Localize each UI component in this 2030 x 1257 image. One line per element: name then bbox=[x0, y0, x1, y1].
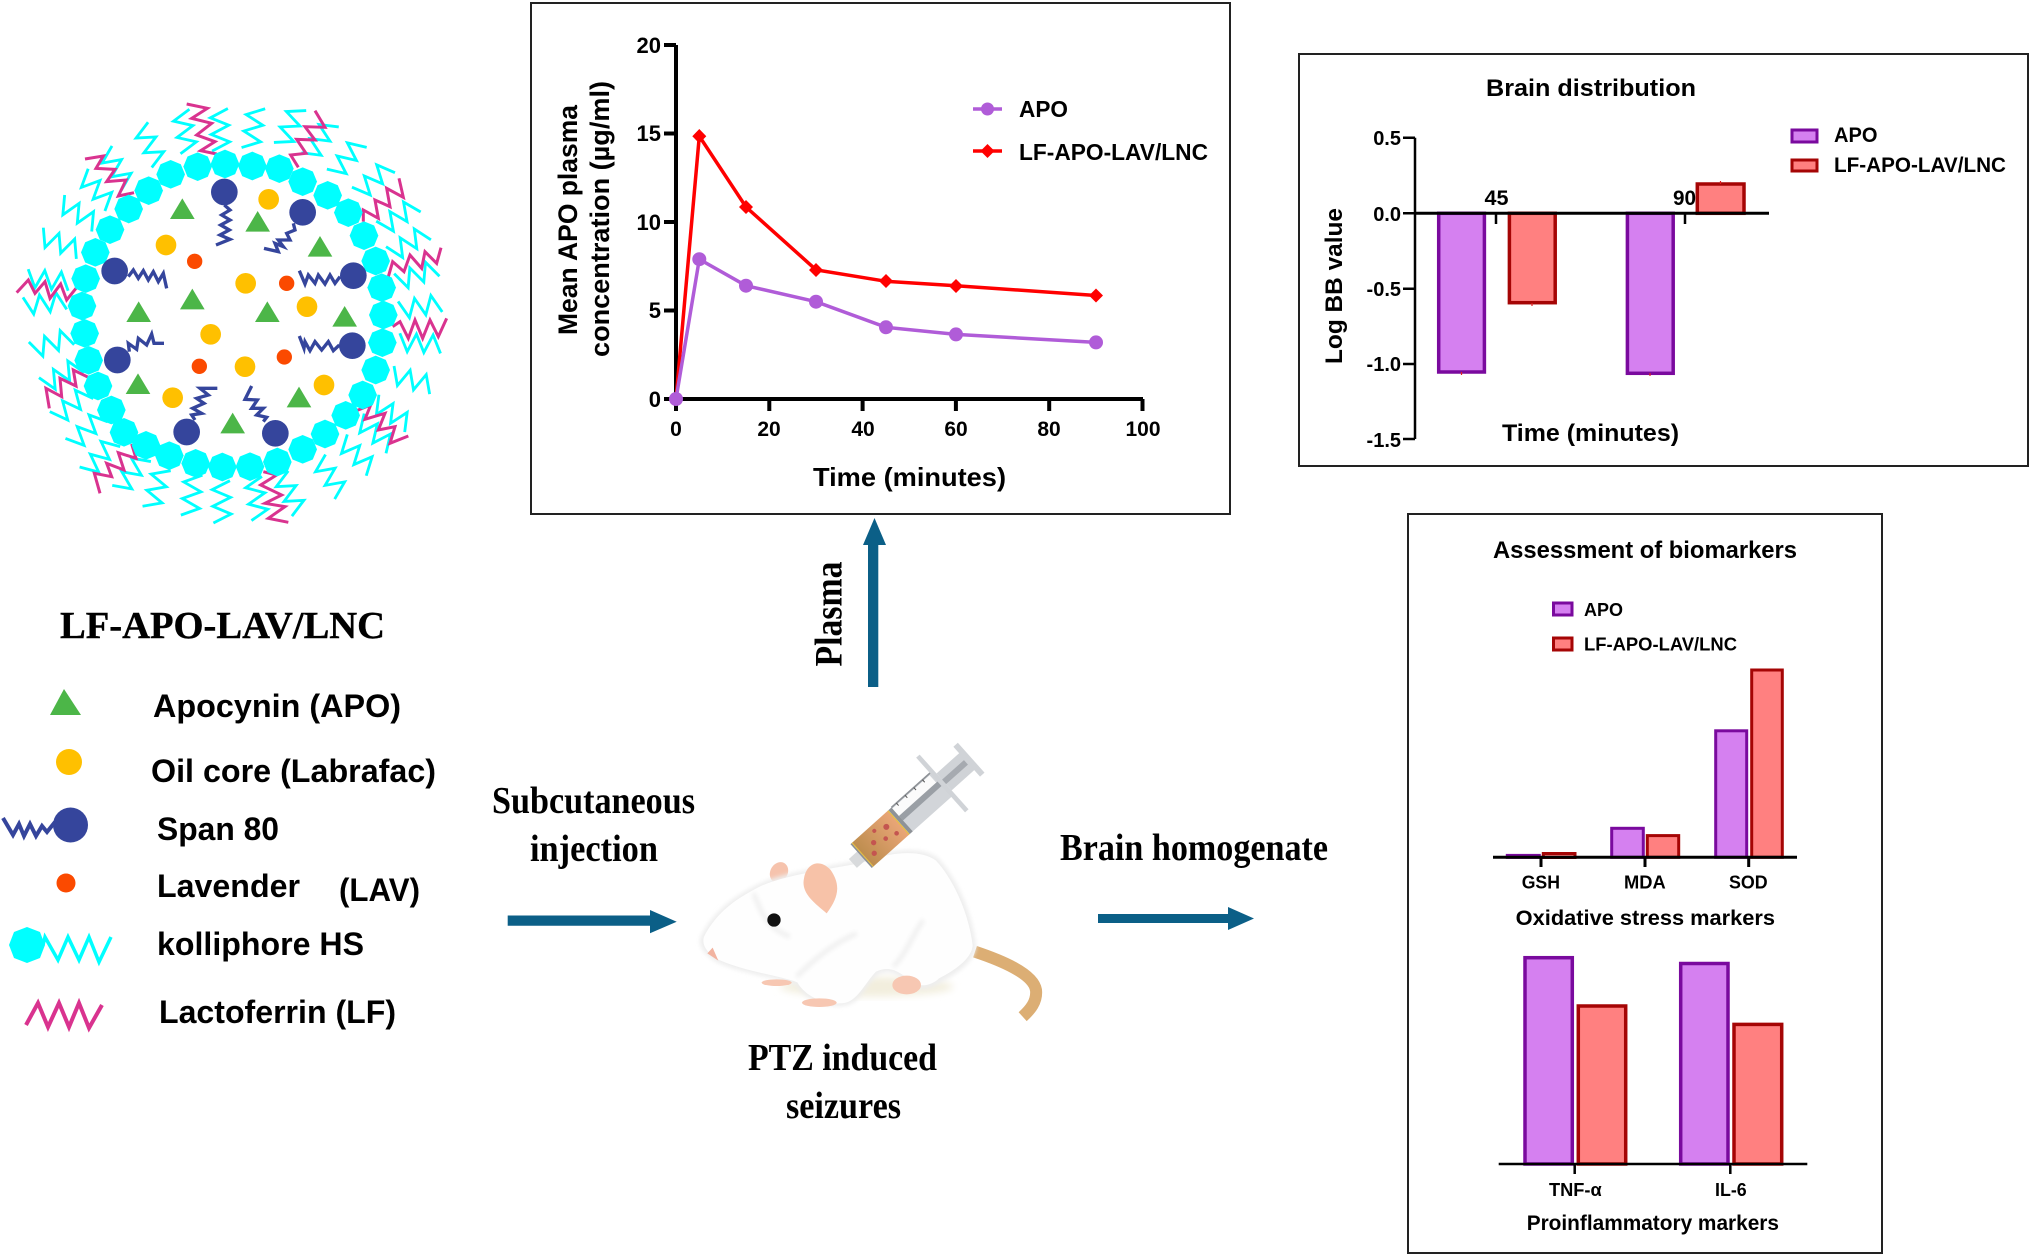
legend title: LF-APO-LAV/LNC bbox=[60, 605, 385, 647]
span 80 molecules bbox=[101, 179, 367, 447]
x tick labels: 40 bbox=[851, 418, 875, 441]
bars bbox=[1439, 184, 1744, 373]
x axis title: Time (minutes) bbox=[1502, 420, 1679, 447]
label: lactoferrin: Lactoferrin (LF) bbox=[159, 994, 396, 1030]
label: proinflammatory markers: Proinflammatory markers bbox=[1527, 1212, 1779, 1235]
chart: proinflammatory markers: IL-6 bbox=[1715, 1180, 1747, 1200]
axes bbox=[1403, 138, 1769, 439]
illustration: rat with syringe bbox=[700, 730, 1036, 1017]
chart: oxidative stress markers: MDA bbox=[1624, 873, 1666, 893]
legend bbox=[1554, 600, 1737, 654]
chart title: Brain distribution bbox=[1486, 75, 1696, 102]
tail bbox=[975, 952, 1036, 1017]
label: span 80: Span 80 bbox=[157, 811, 279, 847]
series: APO bbox=[669, 252, 1103, 406]
label: oxidative stress markers: Oxidative stress markers bbox=[1516, 907, 1775, 930]
panel: brain distribution bar chart bbox=[1299, 54, 2028, 466]
y tick labels: 0.0 bbox=[1373, 204, 1401, 226]
y tick labels bbox=[637, 33, 661, 412]
label: LAV abbreviation: (LAV) bbox=[339, 872, 420, 908]
y tick labels: 10 bbox=[637, 210, 661, 235]
panel: plasma concentration line chart bbox=[531, 3, 1230, 514]
body bbox=[703, 853, 973, 1003]
icon: lavender bbox=[56, 874, 76, 892]
y axis title bbox=[553, 81, 615, 357]
lavender droplets bbox=[187, 254, 294, 374]
body shadow bbox=[700, 850, 976, 1006]
chart: proinflammatory markers: TNF-α bbox=[1549, 1180, 1602, 1200]
y tick labels: 5 bbox=[649, 298, 661, 323]
x tick labels: 100 bbox=[1125, 418, 1161, 441]
nose bbox=[707, 948, 718, 961]
paws bbox=[762, 976, 921, 1007]
legend: APO bbox=[1834, 124, 1878, 147]
syringe bbox=[828, 730, 996, 891]
chart: oxidative stress markers: GSH bbox=[1522, 873, 1560, 893]
icon: span 80 bbox=[3, 808, 88, 842]
label: plasma: Plasma bbox=[808, 562, 850, 666]
y tick labels: 0 bbox=[649, 387, 661, 412]
legend: APO bbox=[1584, 600, 1623, 620]
axes bbox=[664, 45, 1143, 411]
label: subcutaneous injection: injection bbox=[530, 828, 658, 870]
legend: LF-APO-LAV/LNC bbox=[1019, 139, 1208, 165]
y tick labels: 0.5 bbox=[1373, 128, 1401, 150]
legend bbox=[1792, 124, 2006, 177]
caption: PTZ induced seizures: PTZ induced bbox=[748, 1037, 937, 1079]
x axis title: Time (minutes) bbox=[813, 462, 1006, 492]
chart: oxidative stress markers: SOD bbox=[1729, 873, 1768, 893]
y tick labels: -1.5 bbox=[1367, 430, 1401, 452]
fur shading bbox=[753, 893, 923, 977]
series: LF-APO-LAV/LNC bbox=[676, 129, 1103, 399]
chart: oxidative stress markers bbox=[1493, 670, 1797, 893]
y axis title: Log BB value bbox=[1321, 208, 1348, 364]
caption: PTZ induced seizures bbox=[748, 1037, 937, 1127]
apocynin triangles bbox=[126, 198, 357, 433]
legend: APO bbox=[1019, 96, 1068, 122]
chart: proinflammatory markers bbox=[1499, 958, 1807, 1200]
error ticks bbox=[1462, 181, 1720, 376]
oil core droplets bbox=[156, 189, 334, 408]
legend: component key bbox=[3, 688, 436, 1030]
y tick labels: 20 bbox=[637, 33, 661, 58]
label: oil core: Oil core (Labrafac) bbox=[151, 753, 436, 789]
x tick labels: 80 bbox=[1037, 418, 1061, 441]
icon: lactoferrin bbox=[26, 1003, 102, 1028]
category labels bbox=[1484, 187, 1696, 210]
category labels: 45 bbox=[1484, 187, 1509, 210]
y axis title: concentration (µg/ml) bbox=[585, 81, 615, 357]
icon: kolliphore bbox=[9, 927, 111, 963]
label: brain homogenate: Brain homogenate bbox=[1060, 827, 1328, 869]
arrow: injection bbox=[508, 910, 677, 933]
y axis title: Mean APO plasma bbox=[553, 104, 583, 335]
eye bbox=[767, 913, 781, 927]
label: lavender: Lavender bbox=[157, 868, 300, 904]
panel title: Assessment of biomarkers bbox=[1493, 537, 1797, 564]
icon: oil core bbox=[56, 749, 82, 775]
kolliphore heads bbox=[68, 150, 398, 481]
y tick labels: -0.5 bbox=[1367, 279, 1401, 301]
y tick labels: 15 bbox=[637, 121, 661, 146]
label: apocynin: Apocynin (APO) bbox=[153, 688, 401, 724]
legend: LF-APO-LAV/LNC bbox=[1834, 154, 2006, 177]
rear ear bbox=[766, 859, 792, 886]
x tick labels: 20 bbox=[757, 418, 781, 441]
panel: assessment of biomarkers bbox=[1408, 514, 1882, 1253]
ground shadow bbox=[780, 977, 953, 997]
legend bbox=[973, 96, 1208, 165]
arrow: to plasma bbox=[863, 518, 886, 687]
legend: LF-APO-LAV/LNC bbox=[1584, 634, 1737, 654]
kolliphore tails bbox=[23, 104, 442, 523]
caption: PTZ induced seizures: seizures bbox=[786, 1085, 901, 1127]
y tick labels bbox=[1367, 128, 1401, 452]
category labels: 90 bbox=[1673, 187, 1696, 210]
label: subcutaneous injection: Subcutaneous bbox=[492, 780, 695, 822]
arrow: brain homogenate bbox=[1098, 907, 1254, 930]
lactoferrin chains bbox=[17, 104, 447, 522]
front ear bbox=[804, 863, 837, 913]
x tick labels: 0 bbox=[670, 418, 682, 441]
label: kolliphore: kolliphore HS bbox=[157, 926, 364, 962]
y tick labels: -1.0 bbox=[1367, 354, 1401, 376]
nanocarrier diagram bbox=[17, 104, 447, 523]
x tick labels: 60 bbox=[944, 418, 968, 441]
x tick labels bbox=[670, 418, 1161, 441]
label: subcutaneous injection bbox=[492, 780, 695, 870]
icon: apocynin triangle bbox=[50, 689, 81, 715]
